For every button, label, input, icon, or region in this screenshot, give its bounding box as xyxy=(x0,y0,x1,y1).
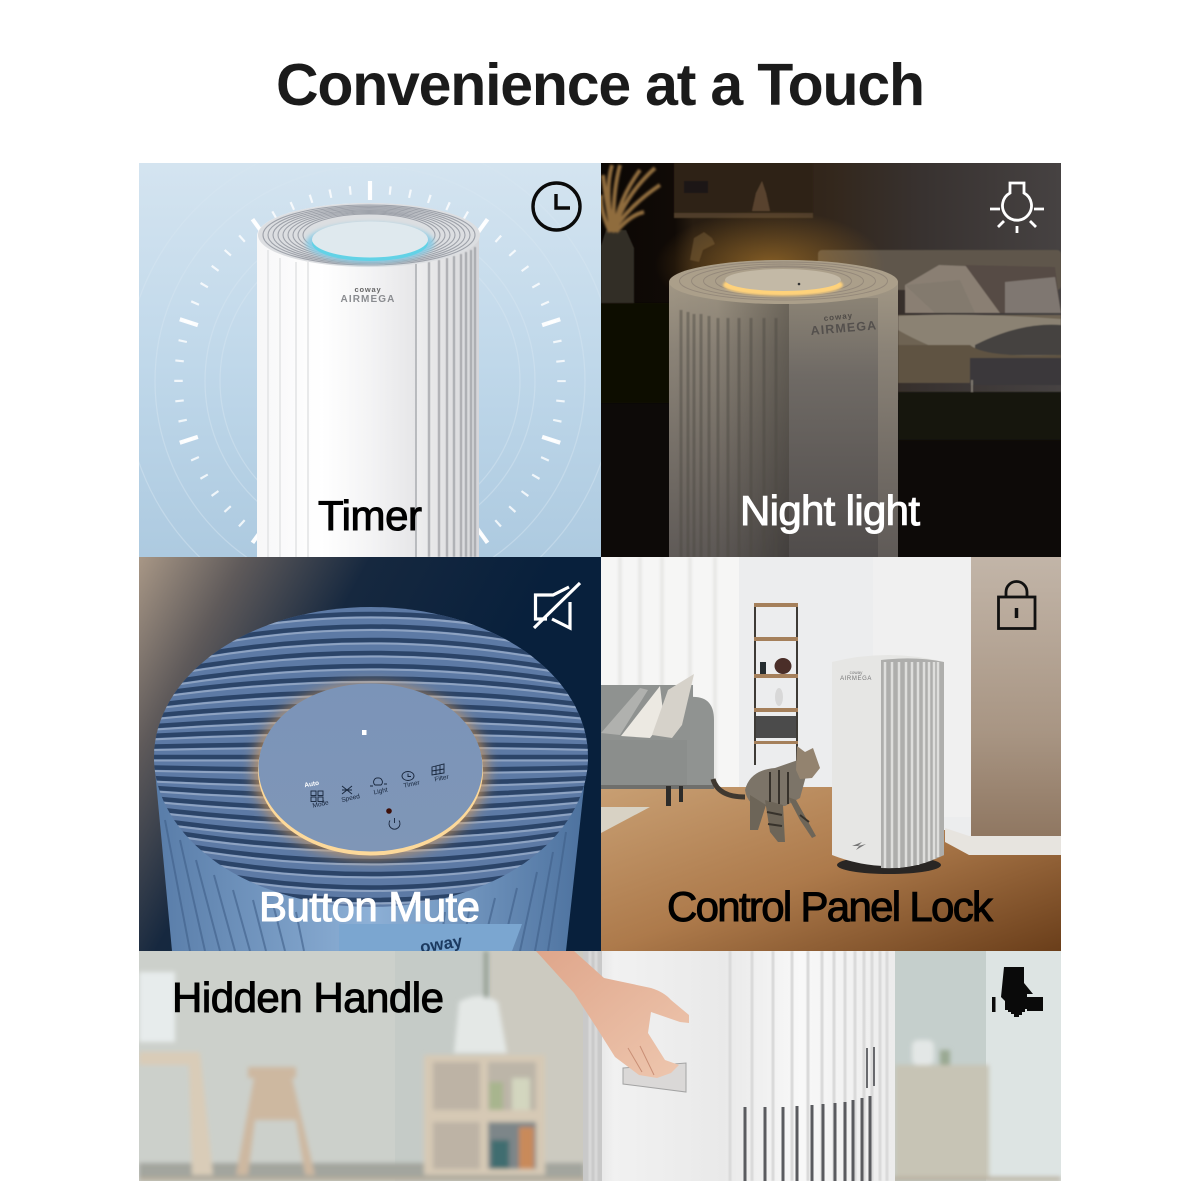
panel controls: Light xyxy=(373,787,388,796)
air purifier: night panel xyxy=(669,260,898,557)
bed xyxy=(818,250,1061,440)
panel: timer xyxy=(125,136,615,626)
vent slots xyxy=(745,1047,874,1181)
panel controls: Filter xyxy=(434,773,450,783)
air purifier: mute panel xyxy=(131,607,611,951)
timer dial ticks xyxy=(178,181,562,572)
panel controls: Speed xyxy=(341,793,361,804)
label: control panel lock: Control Panel Lock xyxy=(667,883,994,930)
warm glow behind purifier xyxy=(664,217,868,280)
shelf unit xyxy=(754,603,798,765)
panel: night light xyxy=(601,163,1061,557)
floor rug xyxy=(601,807,650,833)
panel controls: Mode xyxy=(312,799,330,810)
handle recess xyxy=(623,1063,686,1092)
title: Convenience at a Touch xyxy=(276,52,925,118)
sofa xyxy=(601,674,714,806)
air purifier: room panel xyxy=(832,655,944,874)
air purifier: night panel: AIRMEGA xyxy=(810,318,878,338)
air purifier: handle panel xyxy=(583,951,895,1181)
icon: light bulb xyxy=(990,183,1044,233)
cat xyxy=(713,746,820,842)
control disc with glow ring xyxy=(254,684,488,858)
device logo fragment: oway xyxy=(419,931,464,957)
panel: control panel lock xyxy=(601,557,1061,951)
icon: padlock xyxy=(998,582,1035,628)
air purifier: room panel: coway xyxy=(850,670,863,675)
hand xyxy=(536,951,689,1078)
mute indicator xyxy=(362,730,366,735)
label: hidden handle: Hidden Handle xyxy=(172,974,444,1021)
panel controls: Timer xyxy=(403,779,421,790)
label: timer: Timer xyxy=(318,492,422,539)
label: button mute: Button Mute xyxy=(259,883,480,930)
dried pampas plant xyxy=(601,165,660,232)
panel controls: Auto xyxy=(304,780,320,789)
icon: mute speaker xyxy=(534,583,580,628)
panel: hidden handle xyxy=(139,951,1061,1181)
air purifier: timer panel: AIRMEGA xyxy=(341,294,395,305)
icon: hand on handle xyxy=(992,967,1043,1017)
air purifier: timer panel: coway xyxy=(355,285,381,294)
icon: clock xyxy=(533,183,580,230)
air purifier: room panel: AIRMEGA xyxy=(840,676,872,682)
panel: button mute xyxy=(131,557,611,957)
blurred room furniture xyxy=(139,951,1061,1181)
label: night light: Night light xyxy=(740,487,920,534)
bedroom shelf and decor xyxy=(601,163,814,304)
air purifier: timer panel xyxy=(257,203,480,557)
panel controls xyxy=(304,764,450,829)
air purifier: night panel: coway xyxy=(823,311,854,323)
